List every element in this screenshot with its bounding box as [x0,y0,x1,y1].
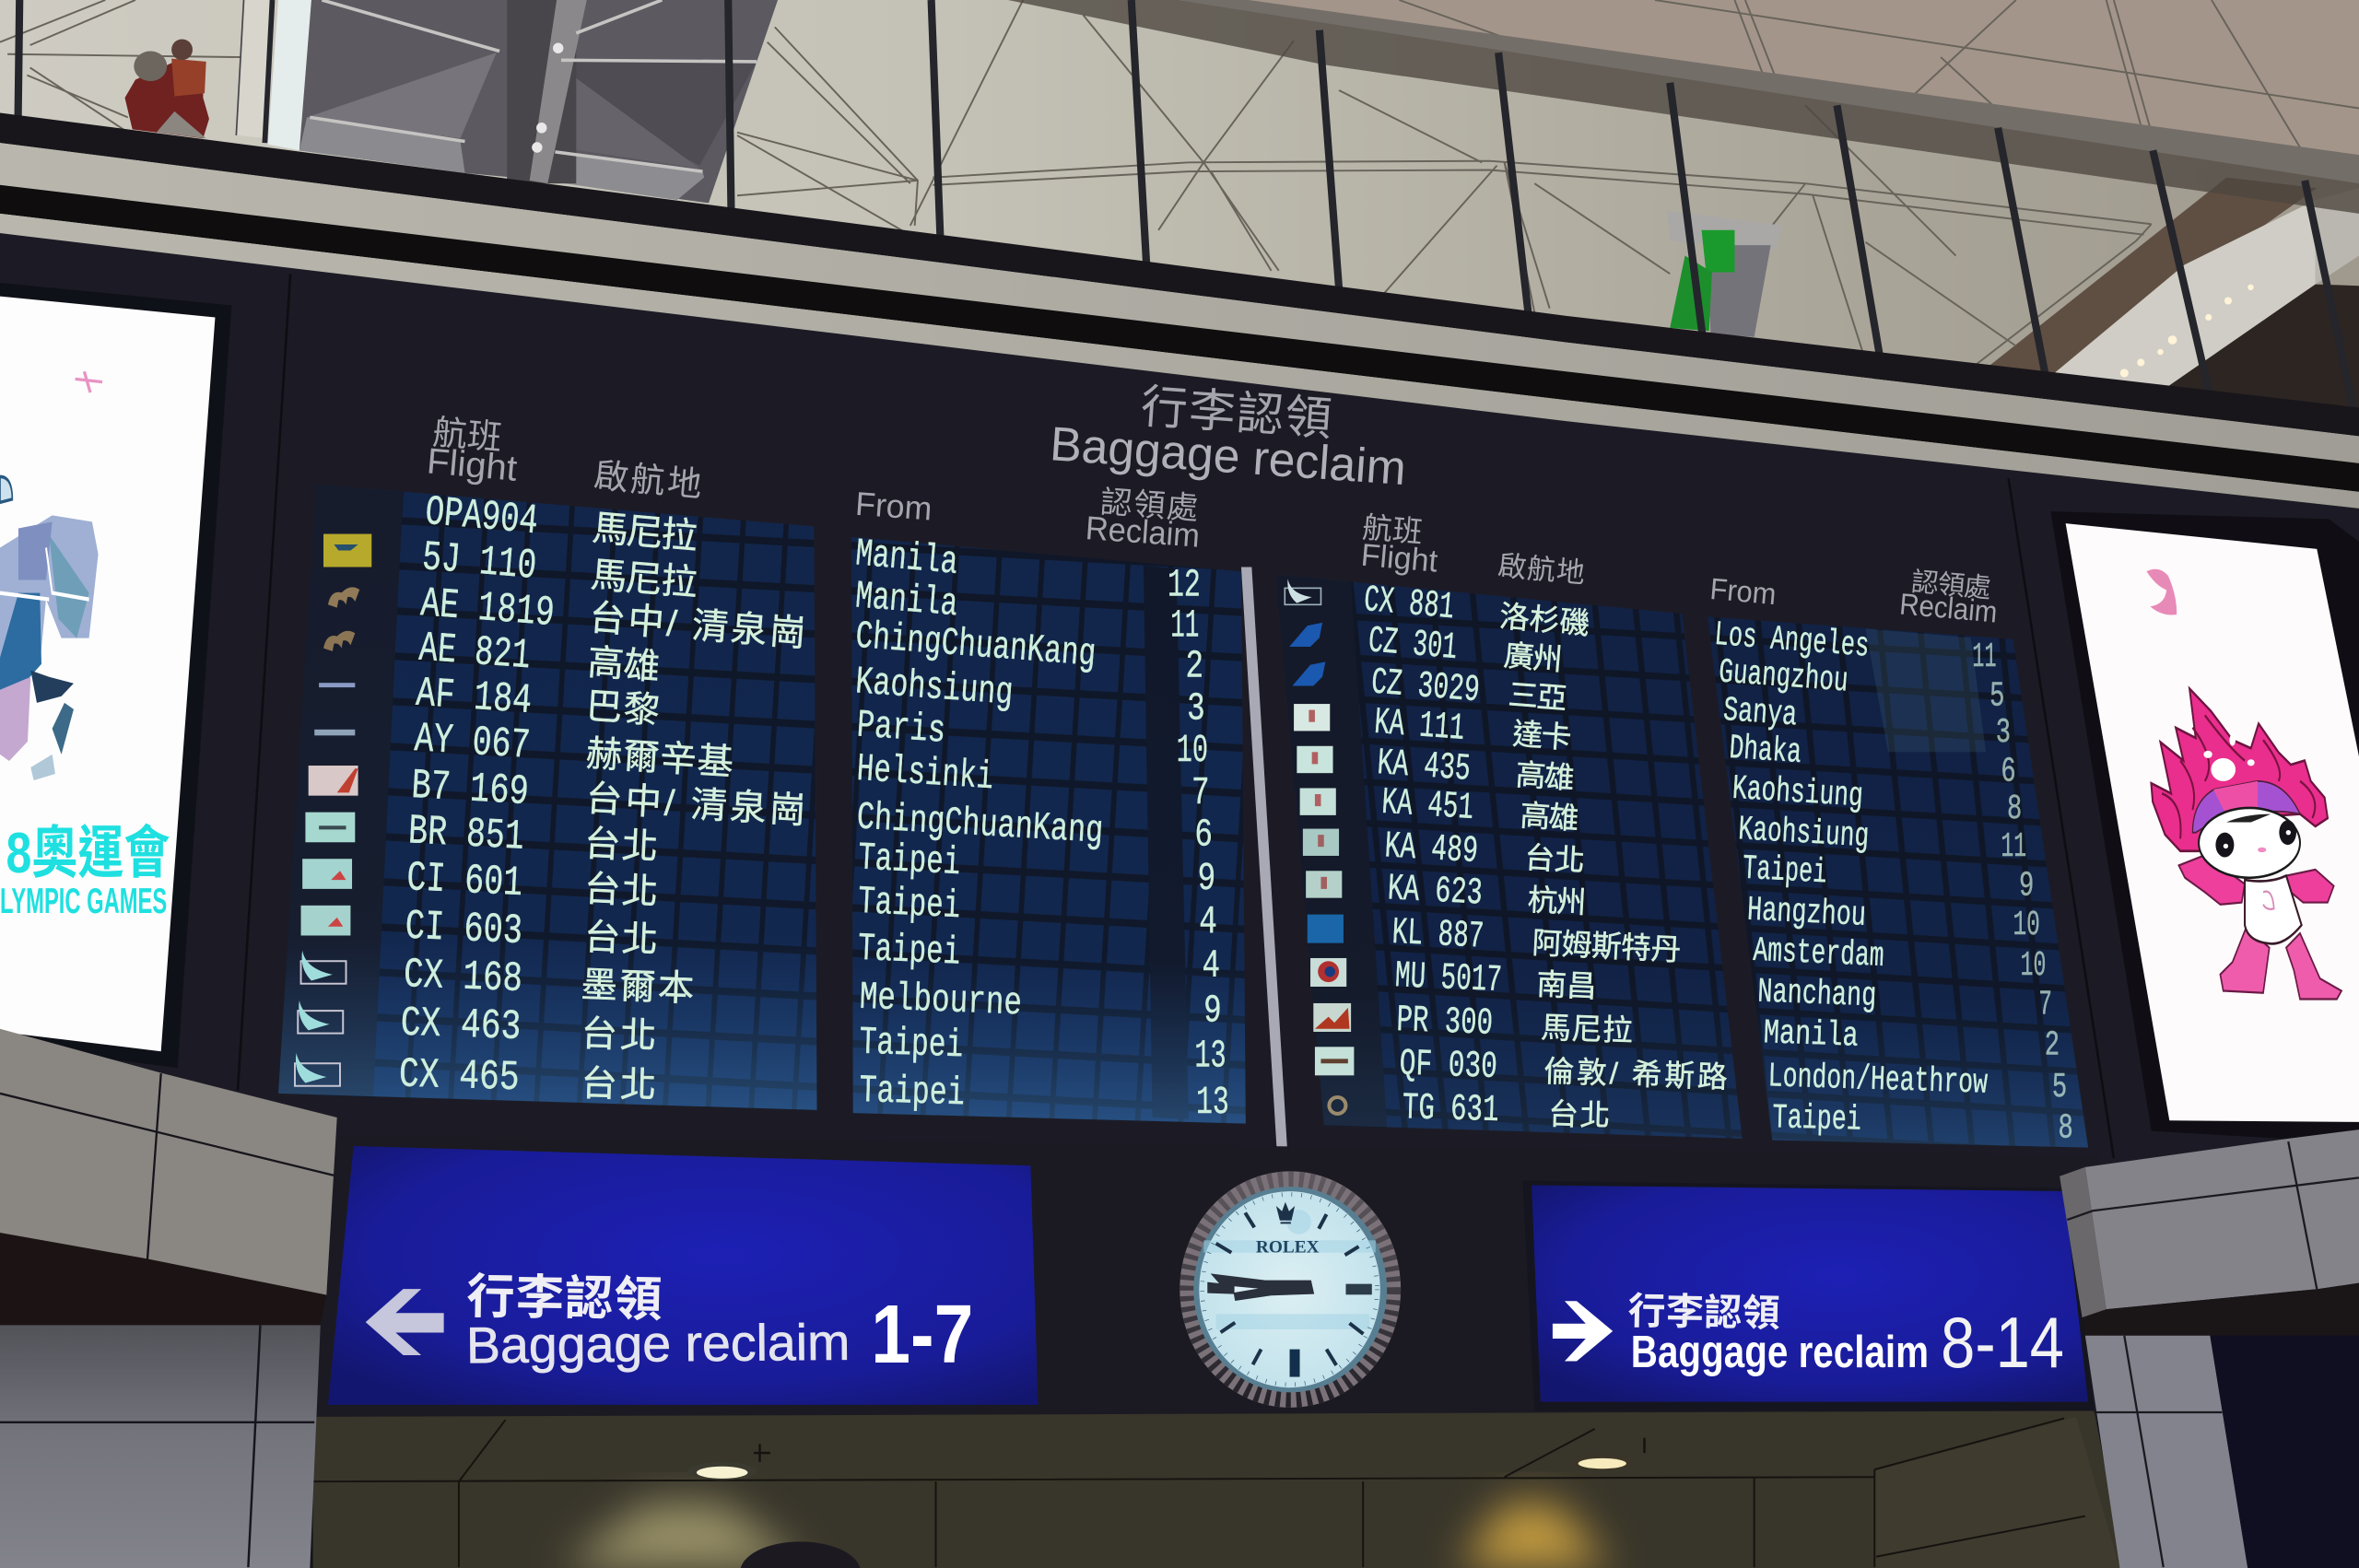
column headers, right [1359,509,1999,629]
board back panel [0,233,2359,1203]
origins in Chinese, right: 高雄 [1515,757,1576,795]
flight numbers, left: BR 851 [407,807,525,861]
flight numbers, left: CX 463 [400,1000,522,1051]
origins in English, right: Sanya [1722,692,1798,735]
column headers, left: 航班 [431,413,503,457]
flight numbers, right: KA 435 [1376,743,1472,791]
display panel: origins right [1708,616,2088,1148]
flame hair [2151,688,2328,851]
heading: English: Baggage reclaim [1049,417,1408,496]
origins in English, right: Nanchang [1757,974,1877,1016]
ad headline: Chinese: 8奧運會 [6,822,170,885]
reclaim belts, right: 8 [2007,790,2022,829]
hanging banner [1667,211,1783,337]
flight numbers, left: B7 169 [410,762,530,816]
games emblem [2146,569,2177,614]
flight numbers, left: CI 603 [405,903,523,955]
flight numbers, left: AF 184 [415,670,534,725]
origins in English, left: Manila [853,574,959,626]
flight numbers, right: KA 623 [1387,868,1484,916]
origins in Chinese, left: 台北 [583,918,659,961]
column headers, left: Flight [425,441,519,489]
origins in English, left: Paris [855,703,947,754]
advertisement: left screen [0,283,231,1068]
clock hands [1207,1273,1314,1301]
arrow right [1553,1301,1613,1362]
right arm [2286,870,2334,903]
flight numbers, right: KA 111 [1373,702,1466,751]
reclaim belts, right: 7 [2038,986,2052,1024]
reclaim belts, right: 11 [1972,638,1997,677]
reclaim belts, right: 9 [2019,867,2034,906]
arrow left [366,1289,444,1355]
ceiling light, right [1570,1454,1634,1470]
origins in Chinese, left: 台北 [581,1064,657,1106]
right wall ledge [2060,1129,2359,1336]
person's head at bottom [740,1541,861,1568]
origins in English, left: ChingChuanKang [854,614,1097,677]
flight numbers, right: CZ 301 [1367,620,1459,670]
reclaim belts, right: 8 [2058,1109,2073,1148]
origins in Chinese, left: 赫爾辛基 [585,734,734,783]
left wall lower [0,1325,321,1568]
lower sign band [293,1136,2099,1422]
origins in Chinese, left: 墨爾本 [581,965,695,1009]
flight numbers, left: OPA904 [423,488,540,545]
sign heading: English: Baggage reclaim [1631,1328,1929,1377]
horse and rider picture [0,476,99,780]
pink emblem [76,371,102,392]
ceiling structural lines [0,0,2359,369]
origins in Chinese, left: 馬尼拉 [591,509,699,557]
origins in English, left: Taipei [859,1021,964,1068]
flight numbers, right: MU 5017 [1394,955,1503,1002]
reclaim belts, right [1972,638,2073,1148]
flight numbers, left: AE 1819 [419,579,557,638]
origins in Chinese, left: 台中/ 清泉崗 [585,779,806,831]
flight numbers, left: CX 465 [398,1051,520,1102]
column headers, left: From [854,485,933,528]
origins in English, right: Amsterdam [1753,932,1884,977]
date window [1345,1284,1372,1294]
reclaim belts, left: 9 [1198,857,1215,901]
sign heading: Chinese: 行李認領 [466,1270,663,1328]
central divider [1241,567,1288,1158]
reclaim belts, left: 11 [1170,604,1199,649]
origins in Chinese, left: 馬尼拉 [589,556,699,603]
flight numbers, left: AE 821 [417,625,532,680]
board panel seams [238,274,2114,1158]
origins in English, right: Manila [1763,1014,1859,1057]
reclaim belts, left [1168,564,1229,1125]
origins in Chinese, right: 南昌 [1536,966,1598,1003]
origins in Chinese, left: 高雄 [586,643,661,688]
airline logos, right [1285,579,1354,1114]
origins in Chinese, right: 達卡 [1511,717,1573,755]
right leg [2286,933,2341,999]
origins in English, right: Kaohsiung [1731,770,1864,817]
flight numbers, right: KA 451 [1380,782,1474,830]
origins in Chinese, left: 台北 [583,825,659,868]
origins in Chinese, right: 三亞 [1507,677,1568,716]
origins in English, left: Kaohsiung [854,660,1015,716]
ceiling soffit [313,1410,2124,1568]
hour markers [1216,1212,1363,1365]
flight numbers, right: CZ 3029 [1370,661,1481,712]
reclaim belts, right: 5 [1989,678,2005,717]
right pillar [2085,1336,2248,1568]
origins in Chinese, right: 高雄 [1520,798,1579,836]
origins in English, left: Taipei [857,880,961,929]
reclaim belts, left: 4 [1202,944,1220,989]
reclaim belts, right: 11 [2001,828,2026,867]
column headers, left: Reclaim [1085,509,1201,555]
flight numbers, right: PR 300 [1396,1000,1494,1046]
origins in Chinese, right: 台北 [1524,840,1586,878]
origins in Chinese, left [581,509,807,1106]
ad headline: English: LYMPIC GAMES [0,882,167,921]
face [2199,808,2300,878]
distant hall lamps [2120,285,2254,377]
column headers, left: 認領處 [1099,485,1200,527]
origins in English, right: Los Angeles [1713,616,1871,667]
lit far hall [2049,200,2316,390]
reclaim belts, right: 6 [2001,753,2016,791]
reclaim belts, left: 3 [1187,686,1205,731]
left leg [2220,927,2270,993]
column headers, right: 認領處 [1910,567,1992,604]
airline logos, left [295,534,371,1086]
sign numbers: 1-7 [871,1289,973,1381]
sign numbers: 8-14 [1941,1302,2064,1383]
column headers, right: 啟航地 [1496,550,1586,590]
advertisement: right screen [2050,511,2359,1143]
sign heading: English: Baggage reclaim [466,1314,851,1374]
origins in English, right: Hangzhou [1746,892,1867,936]
left sign [328,1146,1039,1405]
reclaim belts, left: 6 [1194,813,1213,858]
reclaim belts, left: 9 [1203,989,1222,1034]
origins in English, right: London/Heathrow [1767,1058,1989,1104]
body [2245,876,2302,943]
balcony rail and shadow [1008,0,2359,214]
origins in English, left: Taipei [857,836,961,885]
flight numbers, right: CX 881 [1362,579,1456,629]
reclaim belts, left: 10 [1177,729,1208,773]
display panel: origins left [851,537,1246,1124]
origins in Chinese, left: 台中/ 清泉崗 [588,598,807,654]
origins in English, right: Taipei [1772,1099,1861,1141]
spot lamps [532,43,563,153]
origins in English, left [853,532,1105,1116]
origins in English, left: Manila [853,532,959,585]
flight numbers, left: CI 601 [405,854,523,907]
dark roof facet [299,0,778,203]
origins in Chinese, right: 杭州 [1527,883,1587,919]
flight numbers, right: TG 631 [1402,1087,1499,1132]
origins in English, right [1713,616,1989,1141]
far right dark wall [2210,1336,2359,1568]
reclaim belts, right: 2 [2045,1026,2060,1065]
light side windows [236,0,311,150]
clock [1180,1171,1401,1408]
origins in English, left: ChingChuanKang [855,795,1105,854]
reclaim belts, right: 10 [2013,907,2040,945]
ceiling light, left [687,1462,757,1480]
origins in English, left: Helsinki [855,747,995,800]
origins in Chinese, right [1498,599,1728,1132]
reclaim belts, left: 7 [1191,771,1210,815]
column headers, left [425,413,1201,555]
origins in English, right: Taipei [1742,850,1828,893]
sign heading: Chinese: 行李認領 [1627,1290,1780,1335]
brand name: ROLEX [1256,1238,1320,1258]
reclaim belts, right: 3 [1996,714,2011,753]
right sign [1522,1181,2095,1410]
flight numbers, right [1362,579,1503,1132]
ceiling background [0,0,2359,542]
column headers, right: From [1708,571,1778,611]
origins in Chinese, left: 台北 [581,1014,657,1057]
reclaim belts, left: 13 [1196,1081,1229,1125]
left arm [2178,855,2245,905]
reclaim belts, left: 4 [1199,900,1217,944]
origins in English, left: Melbourne [859,976,1023,1025]
flight numbers, right: KA 489 [1383,825,1479,873]
origins in Chinese, right: 洛杉磯 [1498,599,1591,640]
heading: Chinese: 行李認領 [1139,380,1333,445]
people on balcony [125,39,209,138]
origins in Chinese, right: 阿姆斯特丹 [1532,925,1682,966]
column headers, right: 航班 [1361,509,1424,549]
origins in Chinese, right: 台北 [1548,1096,1611,1132]
flight numbers, left: 5J 110 [420,533,538,591]
origins in Chinese, right: 廣州 [1503,638,1564,676]
display panel: flights left [278,485,817,1110]
brown roof beam [1986,178,2317,378]
flight numbers, left: AY 067 [413,715,532,770]
origins in English, right: Kaohsiung [1737,811,1870,857]
origins in Chinese, right: 倫敦/ 希斯路 [1543,1054,1728,1094]
roof light strips [310,0,757,171]
reclaim belts, left: 2 [1186,645,1203,689]
origins in English, left: Taipei [859,1069,965,1116]
origins in English, left: Taipei [857,927,961,976]
origins in Chinese, left: 巴黎 [585,686,661,731]
left wall ledge [0,1029,337,1325]
origins in Chinese, left: 台北 [583,870,659,913]
clock face [1199,1191,1380,1387]
flight numbers, right: QF 030 [1399,1044,1498,1089]
reclaim belts, left: 13 [1194,1035,1226,1079]
cap [2192,781,2300,833]
flight numbers, left [398,488,557,1102]
column headers, right: Flight [1359,538,1439,579]
parapet and fascia [0,112,2359,509]
column headers, left: 啟航地 [593,456,704,504]
reclaim belts, right: 5 [2052,1069,2067,1107]
column headers, right: Reclaim [1898,586,1999,629]
flight numbers, left: CX 168 [403,951,523,1003]
display panel: flights right [1275,575,1743,1139]
origins in English, right: Dhaka [1728,730,1802,773]
flight numbers, right: KL 887 [1391,912,1485,959]
mascot and emblem [2146,569,2341,999]
origins in English, right: Guangzhou [1718,653,1849,702]
origins in Chinese, right: 馬尼拉 [1541,1010,1634,1047]
section heading [1049,380,1408,496]
balcony mullions [18,0,2356,421]
crown logo [1276,1202,1295,1223]
reclaim belts, left: 12 [1168,564,1201,608]
reclaim belts, right: 10 [2021,947,2046,986]
